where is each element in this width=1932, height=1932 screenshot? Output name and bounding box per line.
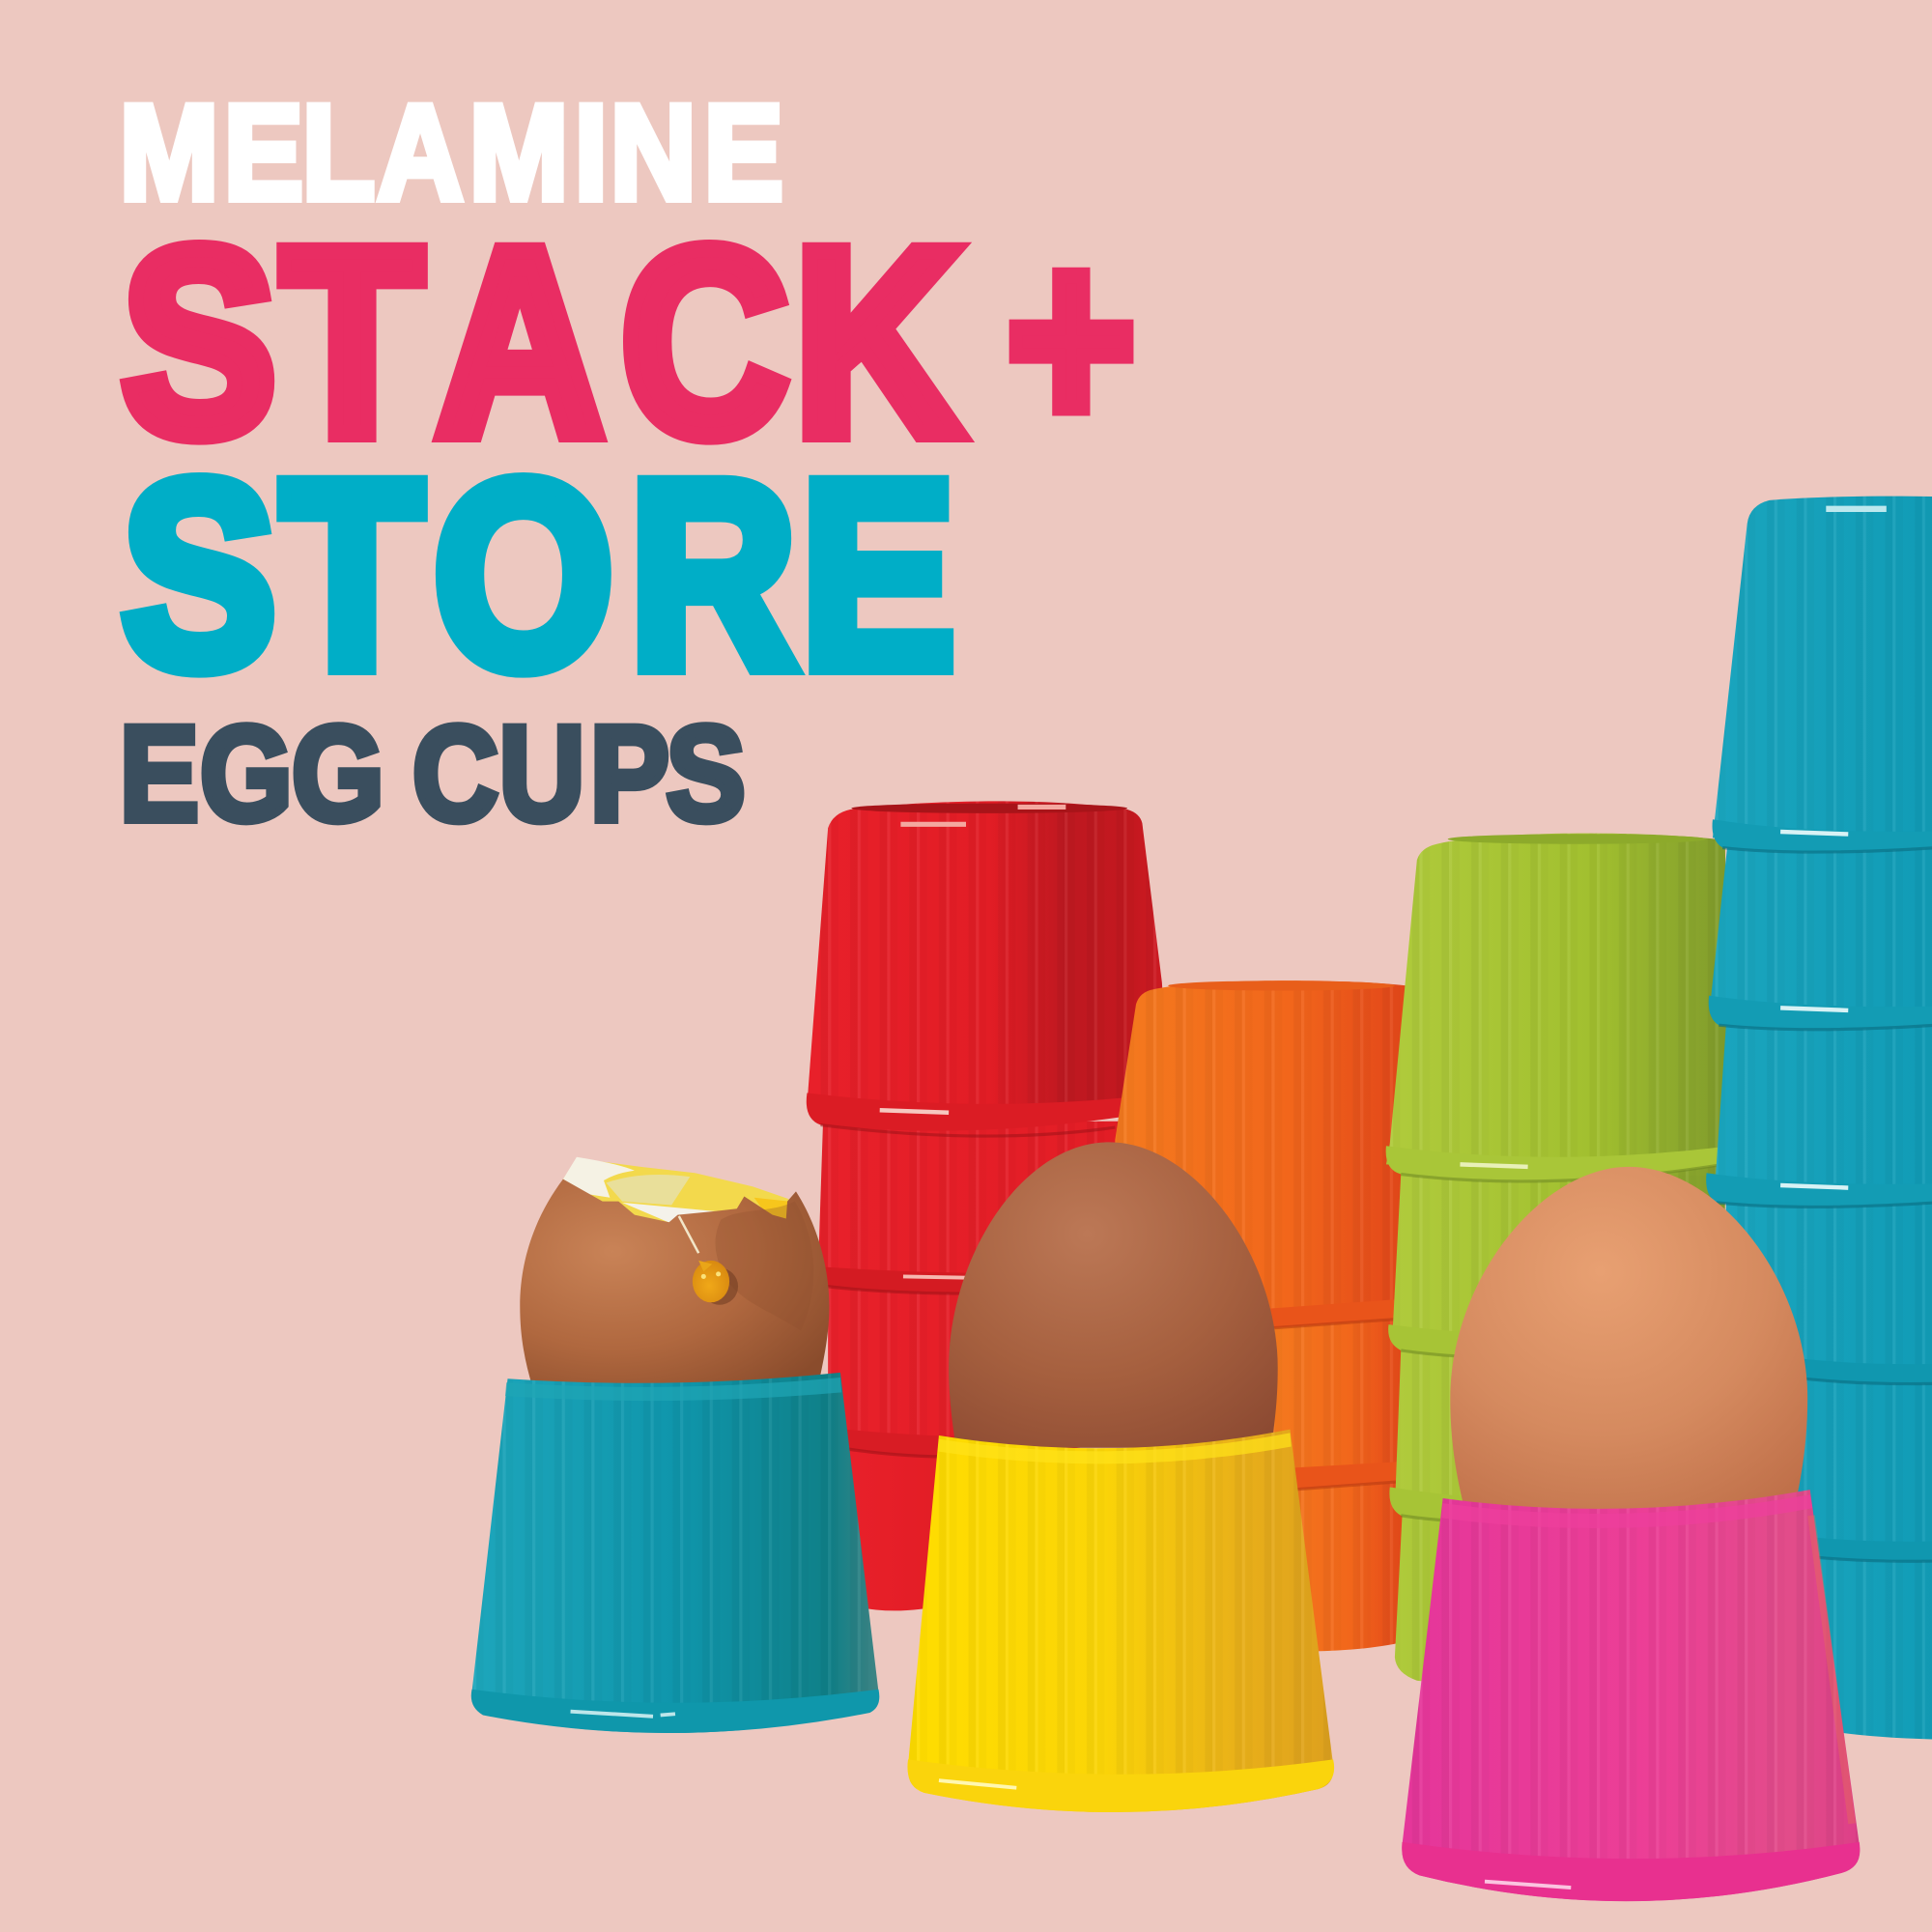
teal front cup	[471, 1373, 879, 1733]
red cup stack	[807, 801, 1171, 1610]
yellow front cup	[907, 1430, 1334, 1812]
orange cup stack	[1115, 980, 1407, 1652]
egg interior	[563, 1158, 788, 1226]
title plus sign: +	[1007, 193, 1136, 485]
green cup stack	[1386, 834, 1731, 1682]
pink front cup	[1402, 1490, 1860, 1901]
title line: STACK: STACK	[122, 193, 961, 491]
brown egg	[949, 1142, 1278, 1448]
title line: MELAMINE: MELAMINE	[120, 77, 783, 228]
yolk drip	[693, 1261, 738, 1305]
title	[120, 77, 1136, 849]
title line: STORE: STORE	[122, 426, 955, 724]
title line: EGG CUPS: EGG CUPS	[120, 698, 746, 849]
photo: egg cups and eggs	[471, 497, 1932, 1901]
egg shell	[520, 1179, 829, 1386]
teal cup stack	[1706, 497, 1932, 1740]
cracked egg with yolk	[520, 1157, 829, 1386]
orange-brown egg	[1450, 1167, 1807, 1516]
